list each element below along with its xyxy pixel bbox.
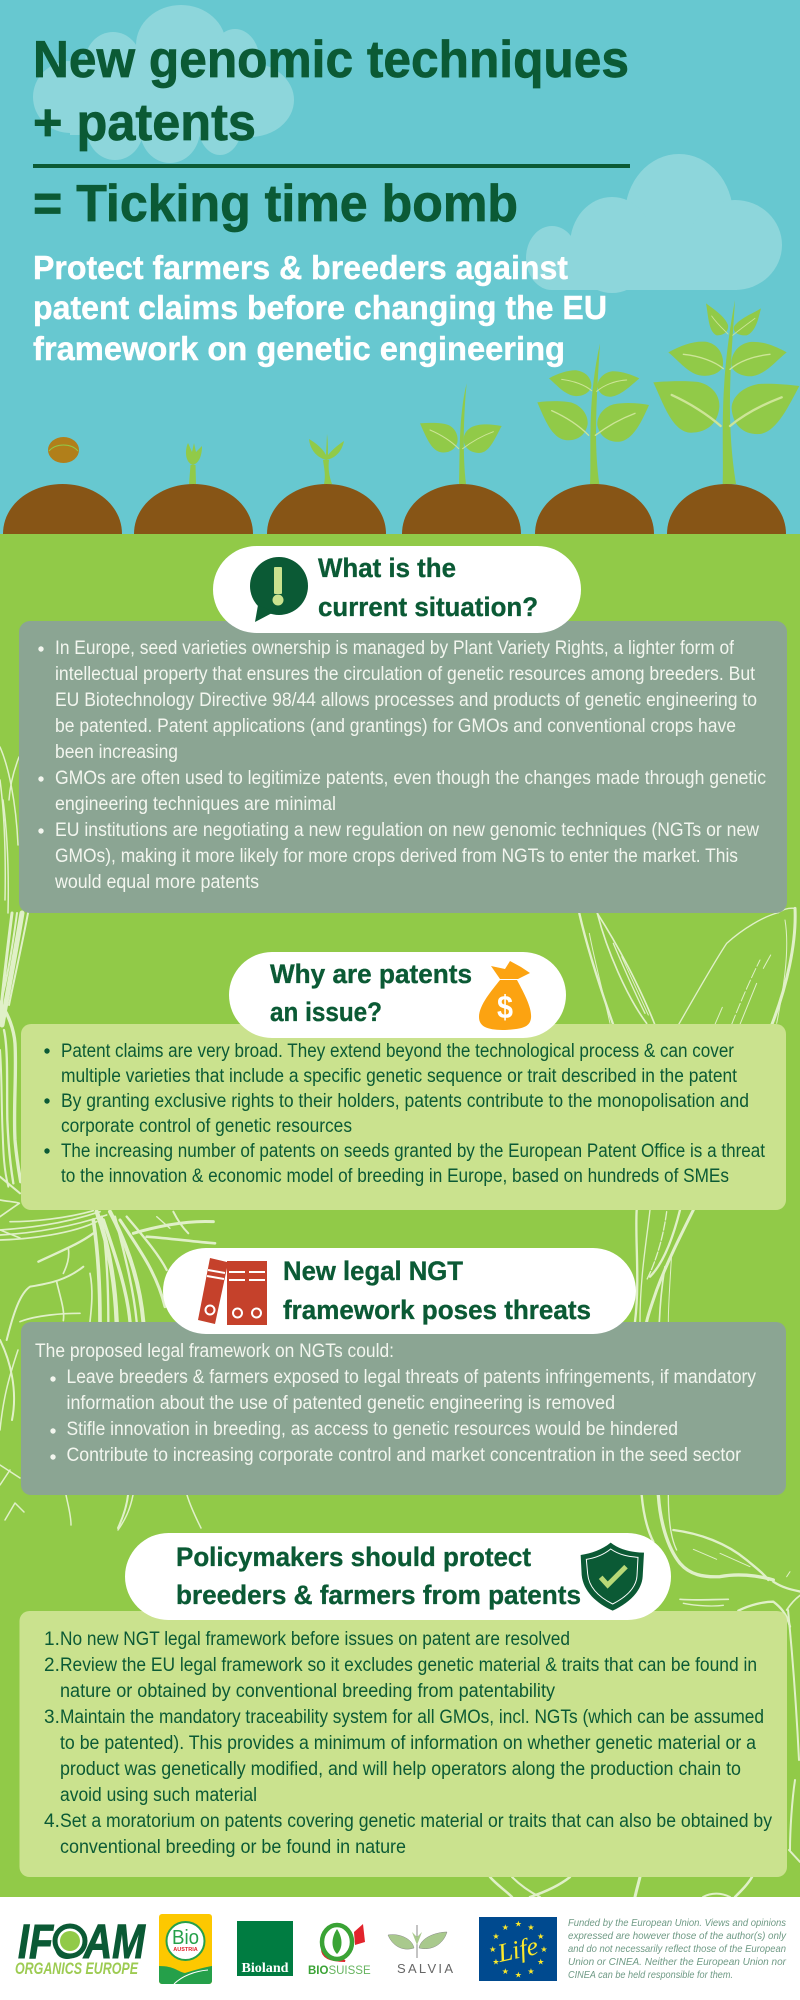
panel background — [19, 621, 787, 913]
heading: What is the — [318, 553, 456, 583]
panel: policymakers should protect — [20, 1533, 787, 1877]
numbered list: Review the EU legal framework so it excludes genetic material & traits that can be found in — [60, 1655, 757, 1676]
logo: Bio Austria: AUSTRIA — [173, 1947, 198, 1953]
title: + patents — [33, 94, 256, 152]
panel: new legal NGT framework poses threats — [21, 1248, 786, 1495]
numbered list: avoid using such material — [60, 1785, 257, 1806]
cloud behind title — [33, 5, 294, 163]
heading: breeders & farmers from patents — [176, 1580, 581, 1610]
logo: Bio Suisse: BIOSUISSE — [308, 1965, 371, 1977]
heading — [270, 959, 472, 1027]
logo: Bio Austria — [159, 1914, 212, 1984]
plant line art: right edge and lower fragments — [490, 1610, 800, 1897]
logo: Bioland: Bioland — [242, 1961, 289, 1976]
logo: EU LIFE: ★ — [540, 1945, 548, 1954]
title: = Ticking time bomb — [33, 175, 518, 233]
heading — [318, 553, 538, 622]
heading: current situation? — [318, 592, 538, 622]
sky background — [0, 0, 800, 534]
panel background — [21, 1024, 786, 1210]
plant line art: left stem upper — [0, 747, 28, 1025]
numbered list: No new NGT legal framework before issues on patent are resolved — [60, 1629, 570, 1650]
bullets — [44, 1048, 50, 1154]
logo: EU LIFE: ★ — [492, 1932, 500, 1941]
icon: exclamation speech bubble — [250, 557, 308, 622]
bullets — [38, 646, 44, 834]
panel: why are patents an issue — [21, 952, 786, 1210]
numbered list: 1. — [44, 1629, 60, 1650]
numbered list: 4. — [44, 1811, 60, 1832]
heading: Why are patents — [270, 959, 472, 989]
soil mounds — [3, 484, 786, 534]
body text: information about the use of patented genetic engineering is removed — [66, 1393, 615, 1414]
logo: EU LIFE — [479, 1917, 557, 1981]
heading: an issue? — [270, 997, 382, 1027]
icon: shield with check — [581, 1543, 644, 1611]
body text: GMOs are often used to legitimize patents, even though the changes made through genetic — [55, 768, 766, 789]
body text: The proposed legal framework on NGTs could: — [35, 1341, 394, 1362]
body text: engineering techniques are minimal — [55, 794, 336, 815]
body text — [35, 1341, 756, 1466]
subtitle: patent claims before changing the EU — [33, 289, 607, 326]
title: New genomic techniques — [33, 31, 629, 89]
body text: EU Biotechnology Directive 98/44 allows processes and products of genetic engineering to — [55, 690, 757, 711]
logo: Salvia — [388, 1925, 453, 1976]
numbered list: nature or obtained by conventional breeding from patentability — [60, 1681, 555, 1702]
numbered list: to be patented). This provides a minimum of information on whether genetic material or a — [60, 1733, 756, 1754]
heading — [176, 1542, 581, 1610]
funding disclaimer — [568, 1918, 787, 1981]
logo: Salvia: SALVIA — [397, 1961, 453, 1976]
body text: be patented. Patent applications (and grantings) for GMOs and conventional crops have — [55, 716, 736, 737]
numbered list: product was genetically modified, and will help operators along the production chain to — [60, 1759, 741, 1780]
body text: multiple varieties that include a specific genetic sequence or trait described in the patent — [61, 1066, 738, 1087]
logo: EU LIFE: ★ — [527, 1923, 535, 1932]
logo: Bioland — [237, 1921, 293, 1976]
body text: been increasing — [55, 742, 178, 763]
logo: EU LIFE: ★ — [489, 1945, 496, 1954]
numbered list — [44, 1629, 772, 1858]
footer — [0, 1897, 800, 2000]
icon: binders — [198, 1258, 267, 1325]
funding disclaimer: CINEA can be held responsible for them. — [568, 1970, 733, 1981]
subtitle — [33, 249, 607, 367]
panel background — [21, 1322, 786, 1495]
heading: Policymakers should protect — [176, 1542, 531, 1572]
body text: to the innovation & economic model of breeding in Europe, based on hundreds of SMEs — [61, 1166, 729, 1187]
body text: EU institutions are negotiating a new regulation on new genomic techniques (NGTs or new — [55, 820, 759, 841]
bullets — [50, 1376, 56, 1460]
plant line art: leaves right, drawn in crop coordinates — [579, 908, 795, 1322]
logo: EU LIFE: ★ — [515, 1970, 522, 1980]
icon: money bag — [479, 961, 531, 1030]
body text: By granting exclusive rights to their holders, patents contribute to the monopolisation and — [61, 1091, 749, 1112]
logo: EU LIFE: ★ — [515, 1920, 522, 1928]
footer background — [0, 1897, 800, 2000]
sprout stage 2 — [309, 434, 344, 484]
body text: Leave breeders & farmers exposed to legal threats of patents infringements, if mandatory — [66, 1367, 756, 1388]
heading pill — [213, 546, 581, 633]
numbered list: conventional breeding or be found in nature — [60, 1837, 406, 1858]
funding disclaimer: expressed are however those of the author(s) only — [568, 1931, 787, 1942]
body text: corporate control of genetic resources — [61, 1116, 352, 1137]
logo: IFOAM Organics Europe: ORGANICS EUROPE — [15, 1959, 138, 1978]
cloud right — [526, 154, 782, 293]
heading pill — [163, 1248, 636, 1334]
logo: Bio Suisse — [308, 1924, 371, 1977]
body text — [54, 638, 766, 893]
body text: Patent claims are very broad. They extend beyond the technological process & can cover — [61, 1041, 735, 1062]
heading: New legal NGT — [283, 1256, 463, 1286]
logo: EU LIFE: ★ — [502, 1967, 509, 1976]
logo: EU LIFE: ★ — [537, 1932, 544, 1941]
logo: EU LIFE: ★ — [537, 1958, 544, 1967]
body text: GMOs), making it more likely for more crops derived from NGTs to enter the market. This — [55, 846, 738, 867]
heading: framework poses threats — [283, 1295, 591, 1325]
logo: EU LIFE: ★ — [527, 1967, 535, 1976]
body text — [61, 1041, 766, 1187]
funding disclaimer: Union or CINEA. Neither the European Union nor — [568, 1957, 787, 1968]
sprout stage 1 — [186, 443, 202, 484]
numbered list: 3. — [44, 1707, 60, 1728]
heading — [283, 1256, 591, 1325]
plant line art: big root right, drawn in crop coordinates — [642, 1495, 800, 1627]
logo: EU LIFE: ★ — [502, 1923, 509, 1932]
subtitle: Protect farmers & breeders against — [33, 249, 568, 286]
heading pill — [125, 1533, 671, 1620]
heading pill — [229, 952, 566, 1038]
plant line art: root fragments under third panel — [0, 1230, 201, 1530]
plant stage 4 — [537, 343, 649, 484]
body text: Stifle innovation in breeding, as access to genetic resources would be hindered — [66, 1419, 678, 1440]
plant line art: stem and roots left, drawn in crop coordinates — [0, 1003, 215, 1340]
logo: IFOAM Organics Europe: IFOAM — [18, 1916, 146, 1969]
logo: EU LIFE: Life — [494, 1931, 541, 1968]
body text: would equal more patents — [54, 872, 259, 893]
panel: what is the current situation — [19, 546, 787, 913]
green ground background — [0, 534, 800, 1897]
numbered list: 2. — [44, 1655, 60, 1676]
plant stage 5 — [653, 300, 799, 484]
seed — [48, 437, 79, 463]
logo: EU LIFE: ★ — [492, 1958, 500, 1967]
seedling stage 3 — [420, 383, 502, 484]
panel background — [20, 1611, 787, 1877]
body text: intellectual property that ensures the circulation of genetic resources among breeders. But — [55, 664, 756, 685]
title — [33, 31, 630, 233]
logo: Bio Austria: Bio — [172, 1927, 199, 1949]
body text: Contribute to increasing corporate control and market concentration in the seed sector — [66, 1445, 742, 1466]
subtitle: framework on genetic engineering — [33, 330, 565, 367]
body text: In Europe, seed varieties ownership is managed by Plant Variety Rights, a lighter form of — [55, 638, 735, 659]
icon: money bag: $ — [497, 989, 513, 1025]
